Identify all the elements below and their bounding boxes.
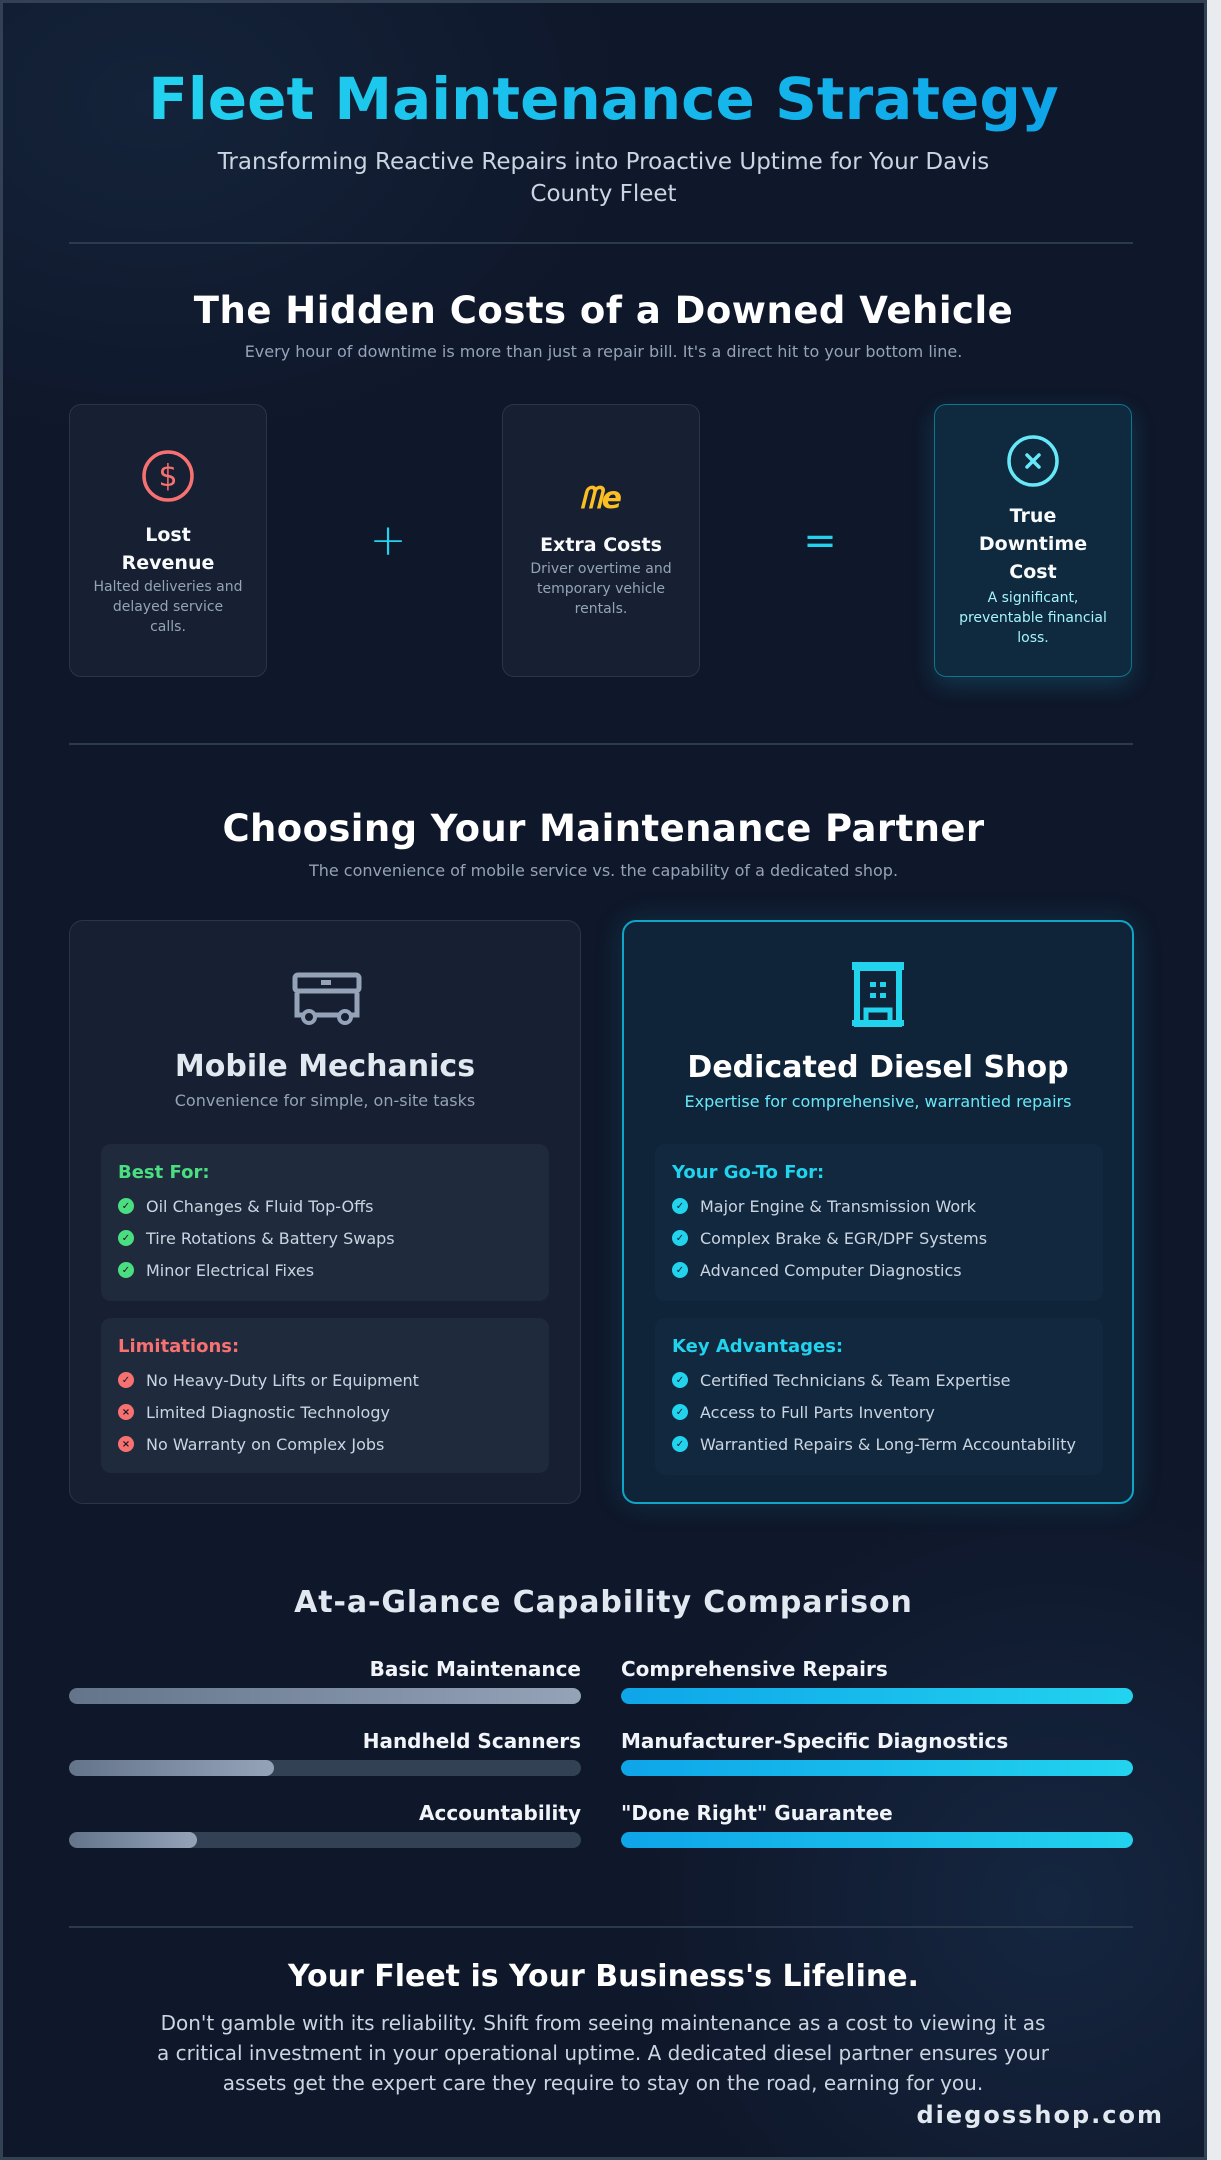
icon: shop building [852, 962, 904, 1027]
card: lost revenue: delayed service [113, 599, 223, 615]
panel title: Mobile Mechanics [175, 1049, 475, 1084]
card: true downtime cost: True [1010, 505, 1056, 527]
bar chart: comparison: Manufacturer-Specific Diagnostics [621, 1729, 1008, 1753]
bar chart: comparison: Comprehensive Repairs [621, 1657, 888, 1681]
box: limitations: × [122, 1438, 130, 1450]
card: lost revenue: Revenue [122, 552, 214, 574]
icon: x circle [1007, 435, 1059, 487]
box: key advantages [655, 1318, 1103, 1475]
box: best for: Oil Changes & Fluid Top-Offs [146, 1196, 373, 1216]
card: true downtime cost: Downtime [979, 533, 1087, 555]
box: go-to for: ✓ [676, 1200, 684, 1212]
box: limitations: No Heavy-Duty Lifts or Equipment [146, 1370, 419, 1390]
panel subtitle: Convenience for simple, on-site tasks [175, 1091, 475, 1110]
card: lost revenue [69, 404, 267, 677]
icon: equals: = [803, 518, 837, 564]
bar chart: comparison: Accountability [419, 1801, 581, 1825]
panel subtitle: Expertise for comprehensive, warrantied repairs [685, 1092, 1071, 1111]
box: limitations: Limited Diagnostic Technology [146, 1402, 390, 1422]
box: go-to for: ✓ [676, 1264, 684, 1276]
box: limitations: ✓ [122, 1374, 130, 1386]
box: key advantages: ✓ [676, 1438, 684, 1450]
card: extra costs [502, 404, 700, 677]
box: key advantages: ✓ [676, 1374, 684, 1386]
card: true downtime cost: Cost [1009, 561, 1057, 583]
heading: conclusion: Your Fleet is Your Business's Lifeline. [288, 1959, 919, 1994]
bar chart: comparison: Handheld Scanners [363, 1729, 581, 1753]
panel title: Dedicated Diesel Shop [687, 1050, 1069, 1085]
panel: mobile mechanics [69, 920, 581, 1504]
box: best for: Best For: [118, 1162, 210, 1183]
heading: hidden costs: The Hidden Costs of a Downed Vehicle [194, 289, 1013, 332]
icon: mobile van [292, 972, 362, 1025]
icon: dollar: $ [158, 459, 178, 494]
bar chart: comparison: Basic Maintenance [370, 1657, 581, 1681]
box: best for: ✓ [122, 1200, 130, 1212]
box: best for [101, 1144, 549, 1301]
card: lost revenue: Lost [145, 524, 191, 546]
box: key advantages: Warrantied Repairs & Long-Term Accountability [700, 1434, 1076, 1454]
conclusion text: a critical investment in your operational uptime. A dedicated diesel partner ensures your [157, 2041, 1049, 2065]
card: lost revenue: calls. [150, 619, 186, 635]
heading: comparison: At-a-Glance Capability Comparison [294, 1585, 913, 1620]
box: key advantages: Access to Full Parts Inventory [700, 1402, 935, 1422]
box: go-to for: Major Engine & Transmission Work [700, 1196, 976, 1216]
box: go-to for: ✓ [676, 1232, 684, 1244]
card: extra costs: Driver overtime and temporary vehicle rentals. [530, 561, 672, 617]
box: go-to for: Your Go-To For: [672, 1162, 824, 1183]
box: limitations [101, 1318, 549, 1473]
card: true downtime cost: A significant, preventable financial loss. [959, 590, 1107, 646]
box: key advantages: Certified Technicians & Team Expertise [700, 1370, 1010, 1390]
conclusion text: Don't gamble with its reliability. Shift from seeing maintenance as a cost to viewing it as [161, 2011, 1045, 2035]
box: go-to for [655, 1144, 1103, 1301]
bar chart: comparison: "Done Right" Guarantee [621, 1801, 893, 1825]
card: lost revenue: Halted deliveries and [94, 579, 242, 595]
box: go-to for: Complex Brake & EGR/DPF Systems [700, 1228, 987, 1248]
box: limitations: × [122, 1406, 130, 1418]
subheading: hidden costs: Every hour of downtime is more than just a repair bill. It's a direct hit to your bottom line. [245, 342, 962, 361]
box: go-to for: Advanced Computer Diagnostics [700, 1260, 962, 1280]
heading: partner: Choosing Your Maintenance Partner [222, 807, 985, 850]
title: Fleet Maintenance Strategy [148, 65, 1059, 133]
box: limitations: Limitations: [118, 1336, 239, 1357]
box: limitations: No Warranty on Complex Jobs [146, 1434, 384, 1454]
box: best for: ✓ [122, 1232, 130, 1244]
subheading: partner: The convenience of mobile service vs. the capability of a dedicated shop. [309, 861, 898, 880]
icon: dollar [142, 450, 194, 502]
box: key advantages: ✓ [676, 1406, 684, 1418]
icon: plus: + [370, 515, 406, 566]
box: best for: ✓ [122, 1264, 130, 1276]
footer: website: diegosshop.com [916, 2101, 1164, 2129]
box: key advantages: Key Advantages: [672, 1336, 843, 1357]
card: extra costs: Extra Costs [540, 534, 662, 556]
conclusion text: assets get the expert care they require to stay on the road, earning for you. [223, 2071, 983, 2095]
card: true downtime cost [934, 404, 1132, 677]
conclusion text [157, 2011, 1049, 2095]
bar chart: comparison [69, 1657, 1133, 1848]
box: best for: Minor Electrical Fixes [146, 1260, 314, 1280]
box: best for: Tire Rotations & Battery Swaps [146, 1228, 395, 1248]
icon: costs: ᗰe [580, 481, 622, 516]
subtitle: Transforming Reactive Repairs into Proactive Uptime for Your Davis County Fleet [218, 149, 989, 207]
panel: dedicated diesel shop [622, 920, 1134, 1504]
